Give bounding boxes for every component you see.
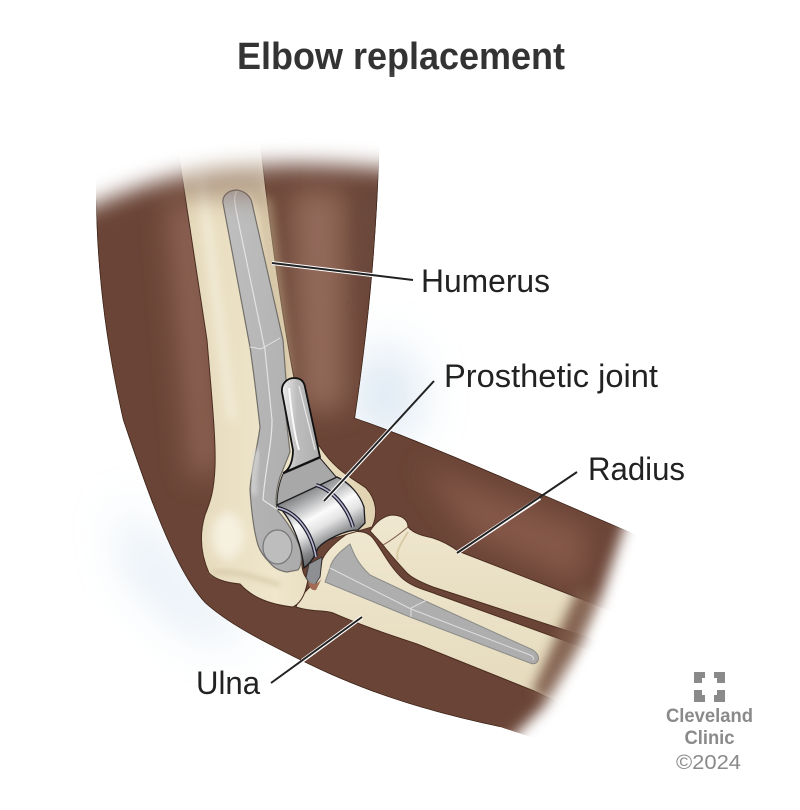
title: Elbow replacement — [237, 36, 565, 78]
leader: prosthetic joint — [324, 381, 434, 501]
icon: logo cross mark — [694, 672, 725, 702]
leader: radius — [457, 472, 577, 553]
implant: hinge cylinder — [277, 477, 365, 568]
logo: Cleveland Clinic — [666, 672, 753, 774]
arm skin — [96, 146, 634, 736]
logo text: Cleveland — [666, 706, 753, 727]
fade overlays — [40, 90, 700, 790]
leader lines halos — [272, 263, 540, 661]
logo: Cleveland Clinic: Clinic — [684, 728, 735, 749]
leader: humerus — [272, 263, 413, 280]
implant: ulnar stem — [325, 544, 538, 664]
hinge pin disc — [263, 530, 292, 564]
bone: humerus — [175, 130, 376, 607]
bone: radius — [370, 515, 640, 664]
label: prosthetic joint: Prosthetic joint — [444, 358, 658, 394]
implant: lower link and gap — [306, 557, 322, 590]
background glow — [120, 347, 419, 640]
leader: ulna — [271, 617, 362, 683]
implant: humeral stem — [223, 190, 301, 572]
label: humerus: Humerus — [421, 263, 550, 299]
illustration: elbow anatomy — [96, 72, 634, 736]
hinge rings — [278, 485, 353, 557]
infographic canvas — [96, 42, 752, 769]
implant: yoke and tab — [277, 378, 337, 506]
bone: ulna — [296, 532, 640, 740]
label: ulna: Ulna — [196, 665, 260, 701]
logo: Cleveland Clinic: ©2024 — [676, 752, 741, 774]
label: radius: Radius — [588, 451, 685, 487]
bone fade into skin — [165, 130, 610, 715]
